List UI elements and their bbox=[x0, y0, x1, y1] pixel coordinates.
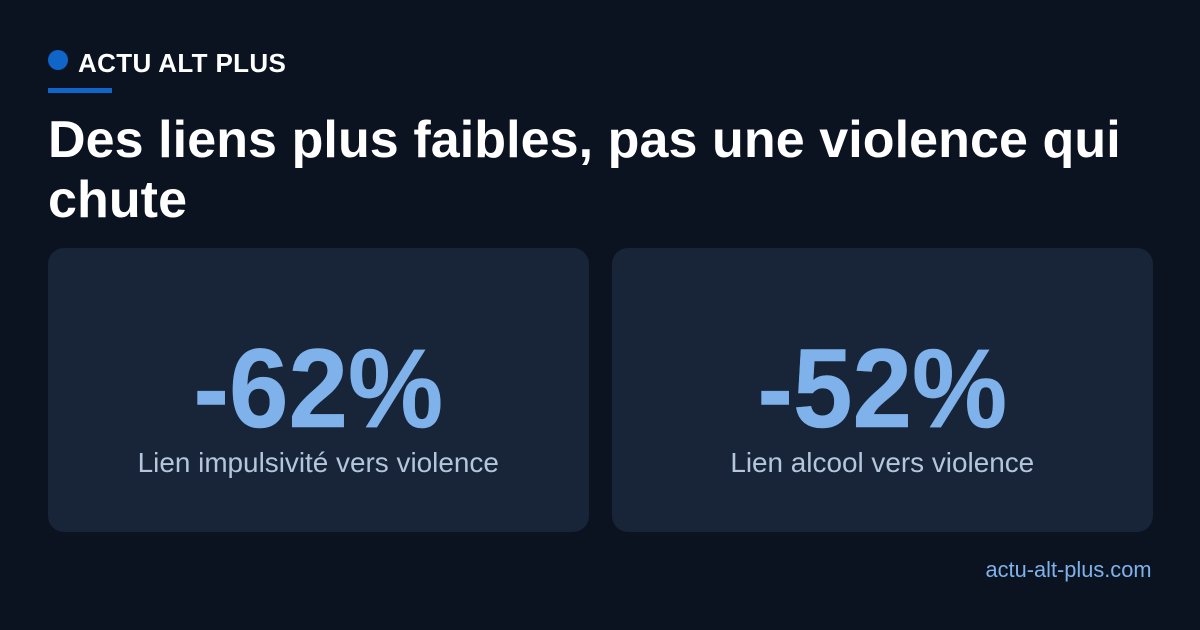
label: alcohol: Lien alcool vers violence bbox=[730, 447, 1034, 478]
brand underline bbox=[48, 88, 112, 93]
brand dot bbox=[48, 50, 68, 70]
panel: alcohol statistic bbox=[612, 248, 1152, 532]
brand name: ACTU ALT PLUS bbox=[78, 48, 286, 78]
value: -62%: -62% bbox=[193, 326, 443, 451]
source url: actu-alt-plus.com bbox=[986, 557, 1152, 582]
value: -52%: -52% bbox=[757, 326, 1007, 451]
label: impulsivity: Lien impulsivité vers violence bbox=[138, 447, 499, 478]
title: Des liens plus faibles, pas une violence qui chute bbox=[48, 111, 1121, 229]
panel: impulsivity statistic bbox=[48, 248, 588, 532]
brand header bbox=[48, 48, 286, 93]
